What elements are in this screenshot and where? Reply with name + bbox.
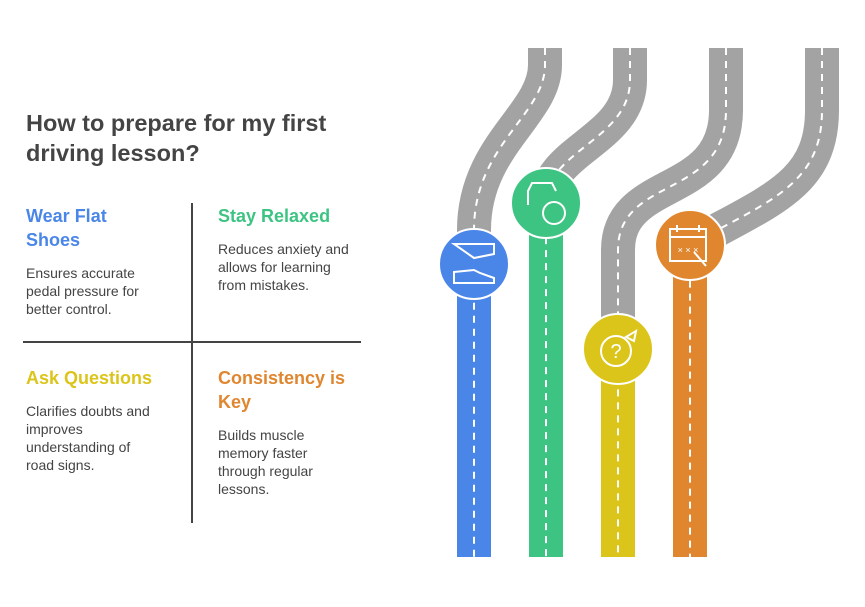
panel: stay relaxed: Stay Relaxed: [218, 206, 330, 226]
icon: question: [583, 314, 653, 384]
panel: consistency: [218, 368, 345, 497]
icon: calendar: × × ×: [678, 245, 698, 255]
panel: stay relaxed: Reduces anxiety and allows for learning from mistakes.: [218, 241, 349, 293]
icon: question: ?: [610, 341, 622, 363]
panel: wear flat shoes: [26, 206, 139, 317]
panel: stay relaxed: [218, 206, 349, 293]
icon: relaxed driver: [511, 168, 581, 238]
panel: ask questions: [26, 368, 152, 473]
panel: ask questions: Clarifies doubts and improves understanding of road signs.: [26, 403, 150, 473]
panel: ask questions: Ask Questions: [26, 368, 152, 388]
icon: shoes: [439, 229, 509, 299]
panel: consistency: Consistency is Key: [218, 368, 345, 412]
panel: wear flat shoes: Wear Flat Shoes: [26, 206, 107, 250]
panel: consistency: Builds muscle memory faster through regular lessons.: [218, 427, 313, 497]
title: How to prepare for my first driving lesson?: [26, 110, 326, 166]
icon: calendar: [655, 210, 725, 280]
panel: wear flat shoes: Ensures accurate pedal pressure for better control.: [26, 265, 139, 317]
